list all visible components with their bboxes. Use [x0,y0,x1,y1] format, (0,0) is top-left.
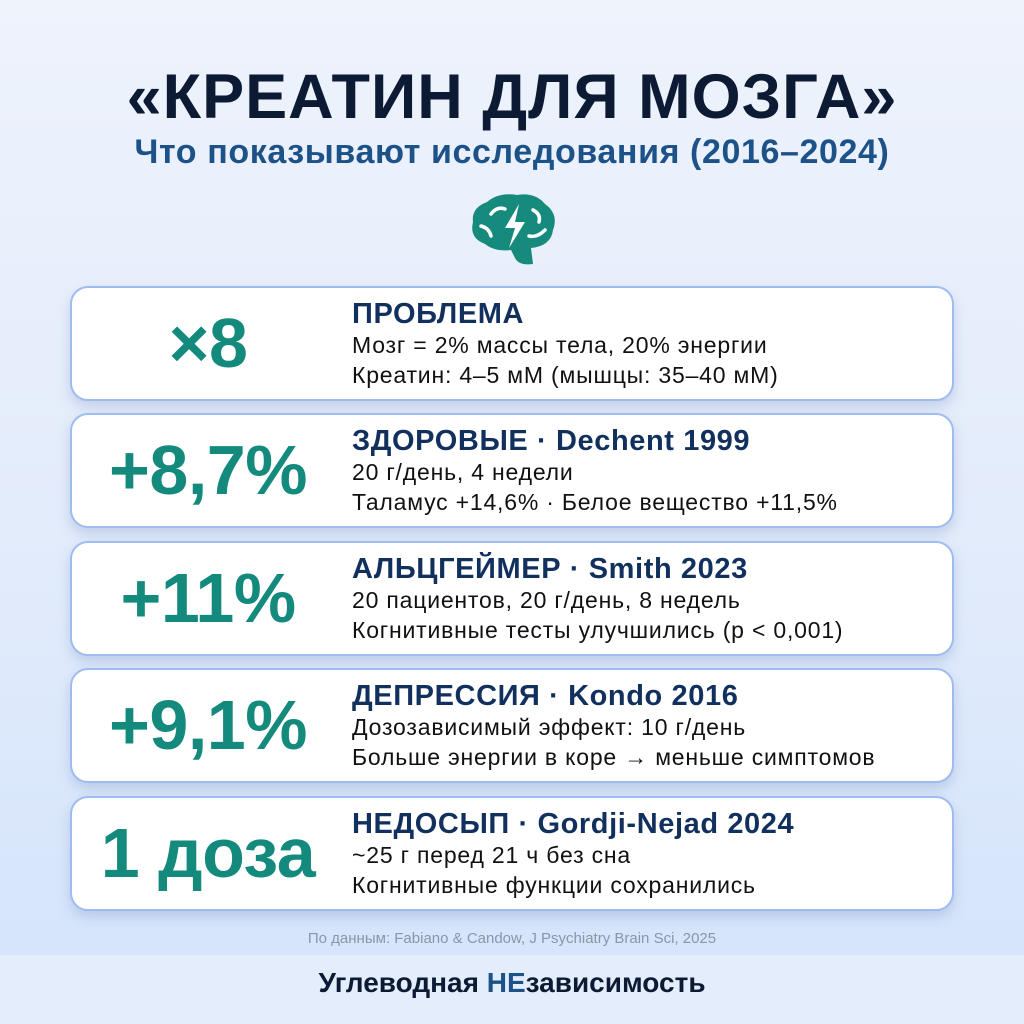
panel: problem: Мозг = 2% массы тела, 20% энергии [352,332,767,358]
panel: depression: Больше энергии в коре → меньше симптомов [352,744,875,770]
panel: healthy: 20 г/день, 4 недели [352,459,574,485]
panel: problem: ×8 [169,304,247,382]
source note: По данным: Fabiano & Candow, J Psychiatry Brain Sci, 2025 [308,930,716,947]
panel: problem: Креатин: 4–5 мМ (мышцы: 35–40 мМ) [352,362,779,388]
icon: brain with lightning [472,194,555,264]
footer brand: Углеводная НЕзависимость [318,967,706,998]
panel: problem: ПРОБЛЕМА [352,298,524,330]
panel: sleep deprivation: НЕДОСЫП · Gordji-Nejad 2024 [352,808,794,840]
panel: depression: Дозозависимый эффект: 10 г/день [352,714,746,740]
title: «КРЕАТИН ДЛЯ МОЗГА» [127,62,897,132]
panel: depression: +9,1% [109,686,307,764]
panel: alzheimer [70,541,954,656]
panel: sleep deprivation: 1 доза [101,814,315,892]
panel: alzheimer: Когнитивные тесты улучшились (p < 0,001) [352,617,843,643]
panel: alzheimer: АЛЬЦГЕЙМЕР · Smith 2023 [352,553,748,585]
footer brand [0,955,1024,1024]
panel: problem [70,286,954,401]
panel: healthy: Таламус +14,6% · Белое вещество +11,5% [352,489,838,515]
panel: sleep deprivation: ~25 г перед 21 ч без сна [352,842,631,868]
panel: healthy [70,413,954,528]
panel: depression: ДЕПРЕССИЯ · Kondo 2016 [352,680,738,712]
panel: alzheimer: 20 пациентов, 20 г/день, 8 недель [352,587,741,613]
subtitle: Что показывают исследования (2016–2024) [134,133,889,171]
panel: healthy: +8,7% [109,431,307,509]
panel: depression [70,668,954,783]
panel: sleep deprivation: Когнитивные функции сохранились [352,872,756,898]
panel: alzheimer: +11% [120,559,296,637]
panel: sleep deprivation [70,796,954,911]
panel: healthy: ЗДОРОВЫЕ · Dechent 1999 [352,425,750,457]
